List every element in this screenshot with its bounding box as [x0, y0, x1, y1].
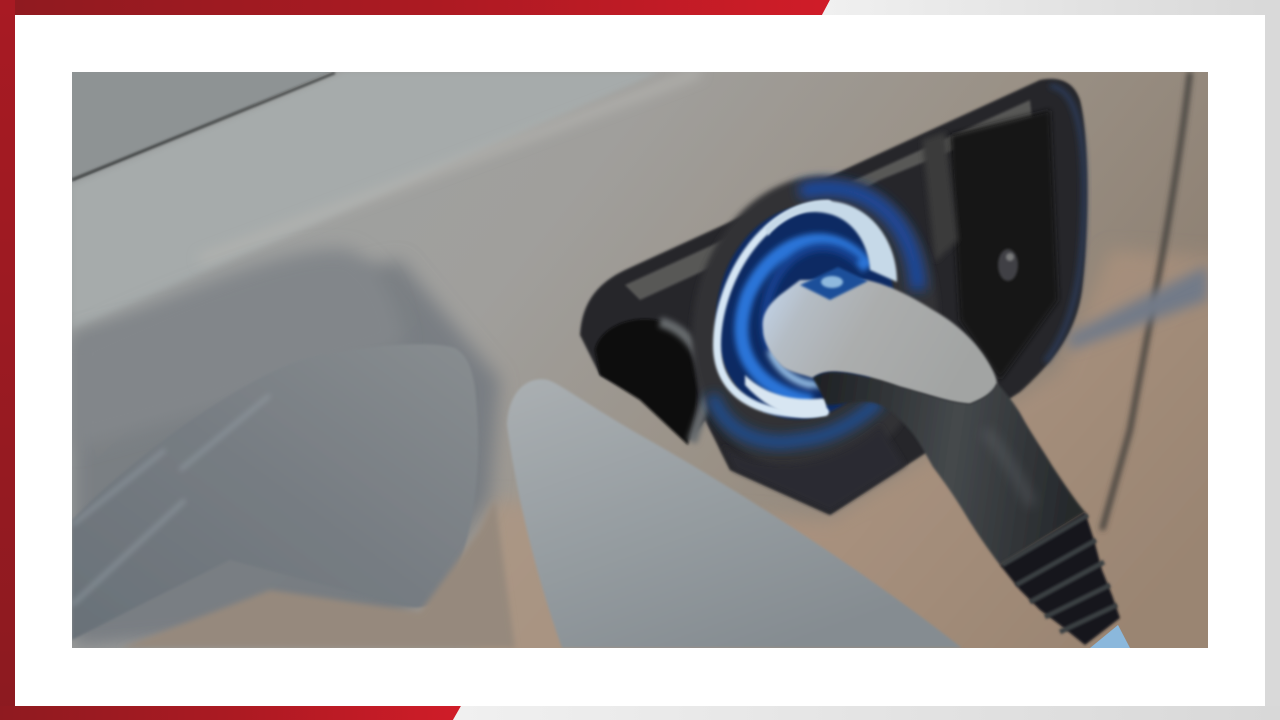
inner socket: [715, 206, 894, 420]
blurred mirror shape: [72, 344, 478, 640]
inner grey column: [922, 132, 958, 262]
blue stripe reflection: [1068, 265, 1208, 350]
frame: top red bar: [0, 0, 830, 15]
strain relief: [1000, 512, 1120, 645]
brown reflection on lower right: [498, 249, 1208, 648]
inner recess: [950, 110, 1058, 380]
port cover lip: [625, 100, 1032, 300]
charger: black grip: [813, 372, 1085, 565]
charger: indicator window: [800, 267, 868, 300]
strain relief ribs: [1002, 515, 1117, 632]
charger: indicator light: [821, 276, 843, 288]
gap below mirror: [120, 500, 515, 648]
lower dark socket band: [722, 425, 905, 512]
car body background: [72, 72, 1208, 648]
glowing white ring: [717, 204, 828, 413]
port blue edge glow: [1045, 86, 1084, 362]
upper left door panel: [72, 72, 330, 182]
frame: top grey bar: [822, 0, 1280, 15]
charge port opening: [580, 79, 1087, 515]
highlight crease: [378, 72, 696, 196]
latch bolt: [998, 249, 1018, 281]
charger: grey handle: [763, 280, 997, 404]
white ring thick top right: [765, 201, 897, 282]
blue cable: [1090, 625, 1130, 648]
charging socket outer housing: [689, 172, 936, 462]
open charge flap: [507, 379, 962, 648]
blue swirl rings: [741, 240, 868, 402]
frame: left red bar: [0, 0, 15, 720]
latch bolt highlight: [1006, 253, 1014, 261]
left round cap: [595, 319, 697, 445]
cap rim highlight: [660, 322, 708, 442]
photo: EV charger plugged into car: [72, 72, 1208, 648]
door seam line: [72, 73, 335, 180]
frame: right grey bar: [1265, 0, 1280, 720]
white ring thick bottom: [745, 375, 827, 417]
shadow under crease: [108, 244, 382, 332]
lower left dark body: [72, 260, 500, 648]
outer blue glow: top right arc: [800, 188, 918, 290]
light shoulder band: [72, 72, 660, 330]
outer blue glow: lower left arc: [712, 395, 880, 442]
frame: bottom red bar: [0, 706, 461, 720]
mirror light streaks: [72, 395, 270, 605]
door seam on the right: [1102, 72, 1190, 530]
grip scuff highlight: [985, 430, 1032, 505]
frame: bottom grey bar: [453, 706, 1280, 720]
